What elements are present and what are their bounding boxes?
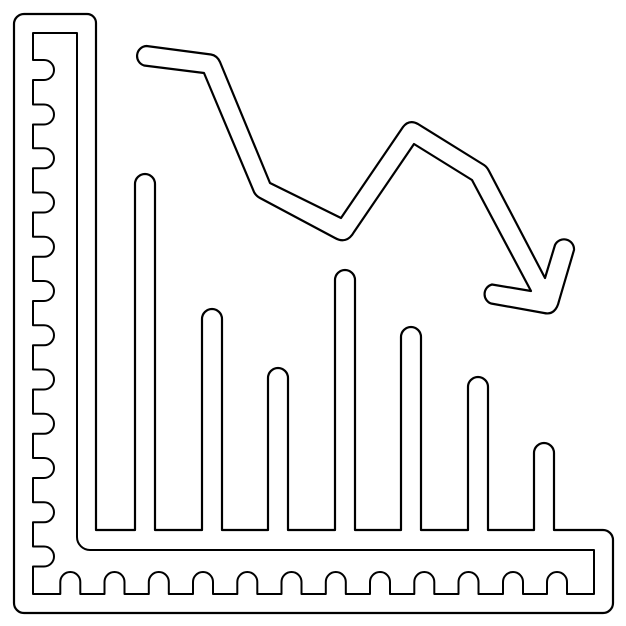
trend arrow pointing down — [137, 46, 574, 313]
